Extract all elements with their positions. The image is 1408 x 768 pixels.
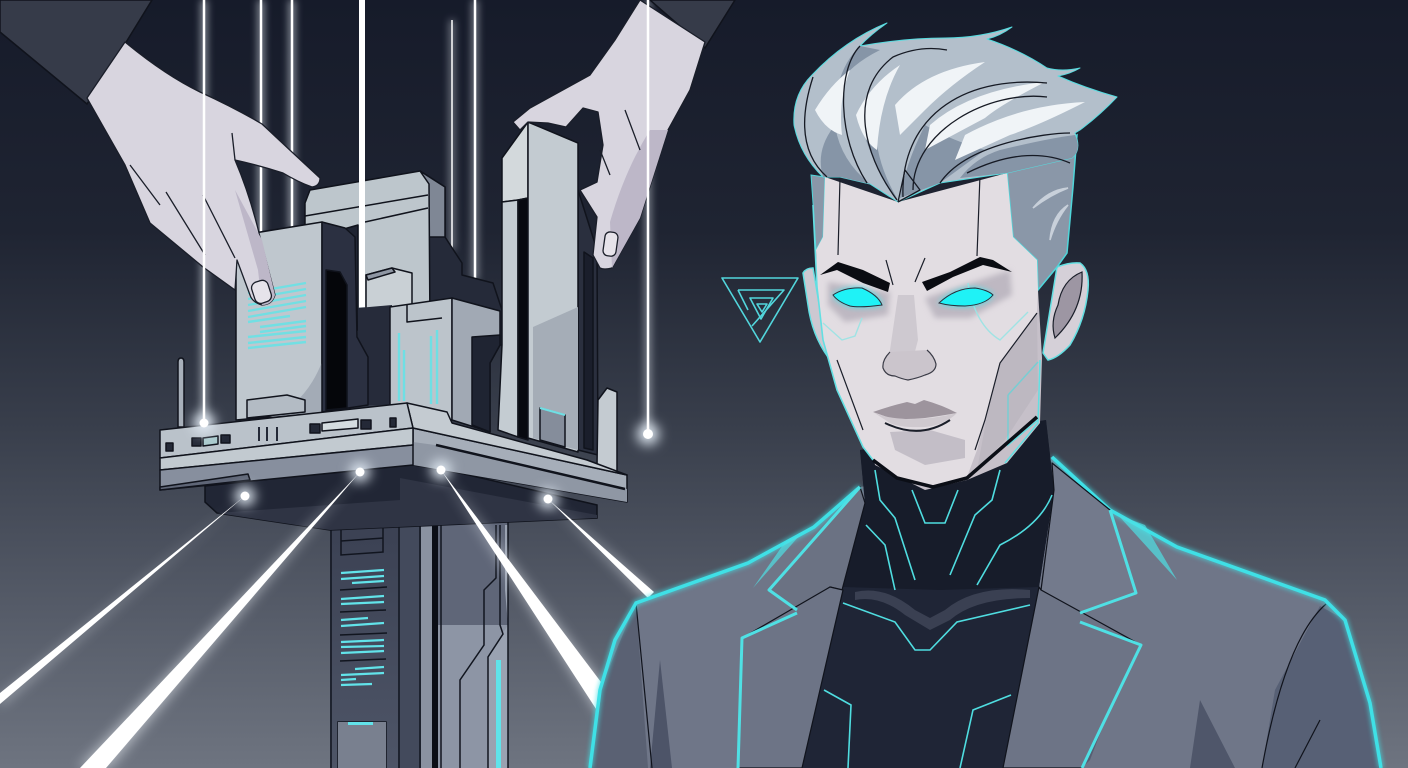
lapels (738, 463, 1141, 768)
left sleeve (0, 0, 152, 104)
tall module (498, 122, 617, 472)
hair strands (805, 46, 1070, 202)
light nodes (193, 0, 659, 509)
eyes (833, 288, 993, 307)
antenna (178, 358, 184, 427)
right sleeve (650, 0, 735, 48)
fingernail (602, 231, 619, 257)
module text lines (248, 283, 306, 348)
back module (305, 171, 502, 345)
hair (794, 23, 1117, 202)
face (816, 173, 1038, 485)
glowing shoulder outline (590, 457, 1381, 768)
face lines (837, 175, 1037, 450)
platform underside (205, 463, 597, 530)
nose (883, 350, 936, 380)
right hand (513, 0, 705, 269)
brows (820, 257, 1012, 292)
shirt folds (855, 589, 1030, 630)
tower pillar (330, 512, 508, 768)
facial shading (828, 270, 1038, 470)
jacket (590, 457, 1381, 768)
hair shadows (821, 46, 1078, 200)
server status lines (341, 570, 384, 685)
cheek circuit (823, 283, 1028, 340)
shirt (802, 420, 1054, 768)
middle module (390, 298, 500, 432)
fingernail (250, 279, 273, 305)
neck (870, 290, 1042, 490)
ears (803, 263, 1088, 360)
dark core (358, 305, 392, 405)
left hand (87, 42, 320, 305)
left module (236, 222, 368, 420)
mouth (873, 400, 957, 431)
person (590, 23, 1381, 768)
hair highlights (815, 62, 1085, 160)
diagonal light beams (0, 470, 654, 768)
light beam over back module (357, 0, 367, 307)
icon: nested triangles (722, 278, 798, 342)
side hair (1007, 135, 1077, 290)
vertical light beams (204, 0, 648, 433)
platform (160, 403, 627, 502)
